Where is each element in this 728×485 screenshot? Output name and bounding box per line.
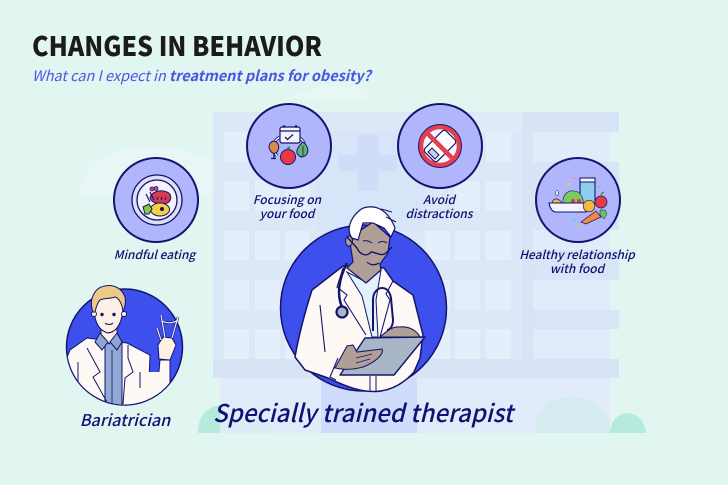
label: Focusing on [253, 191, 322, 208]
face details [105, 323, 113, 324]
collar [95, 333, 122, 350]
item: avoid distractions: distractions [405, 205, 474, 222]
figure: bariatrician [60, 285, 182, 408]
hand [158, 337, 176, 360]
ear right [122, 312, 126, 316]
item: healthy relationship with food [519, 158, 636, 277]
trees [198, 397, 646, 433]
hair [91, 285, 125, 312]
ears [92, 312, 96, 316]
label: Mindful eating [114, 246, 197, 263]
shirt and tie [105, 342, 122, 406]
label: Healthy relationship [519, 246, 636, 263]
placket [370, 376, 376, 392]
lapels [78, 345, 140, 404]
entrance [321, 378, 417, 433]
item: focusing on your food [247, 104, 331, 222]
icon: meal and glass [549, 177, 607, 226]
icon: plate of food [132, 175, 182, 225]
neck and face [347, 222, 390, 283]
item: focusing on your food: your food [259, 205, 316, 222]
subtitle: What can I expect in treatment plans for obesity? [32, 65, 374, 86]
hair [349, 207, 395, 240]
label: specially trained therapist: Specially trained therapist [213, 395, 516, 430]
icon: calendar and food [269, 125, 308, 164]
left hand [335, 345, 382, 369]
right hand [380, 327, 420, 337]
clipboard [340, 337, 425, 375]
blue circle [280, 225, 446, 391]
stethoscope [336, 263, 393, 331]
lapels [320, 268, 393, 352]
neck [101, 328, 117, 344]
label: bariatrician: Bariatrician [80, 407, 171, 431]
label: Avoid [423, 191, 456, 208]
icon: no phone [418, 124, 462, 168]
figure: therapist [280, 207, 446, 392]
right eye [112, 313, 116, 316]
shirt [347, 270, 381, 337]
head [95, 296, 123, 333]
cross sign [338, 135, 397, 191]
bariatric tool [157, 315, 178, 340]
background: hospital building [213, 112, 619, 433]
coat [295, 266, 423, 392]
ear [346, 236, 352, 246]
item: avoid distractions [398, 104, 482, 222]
item: mindful eating [114, 158, 198, 263]
cuff [330, 358, 338, 380]
item: healthy relationship with food: with food [550, 260, 606, 277]
coat [68, 338, 170, 404]
title: CHANGES IN BEHAVIOR [32, 25, 322, 64]
glasses [347, 237, 392, 255]
blue circle [66, 289, 182, 405]
